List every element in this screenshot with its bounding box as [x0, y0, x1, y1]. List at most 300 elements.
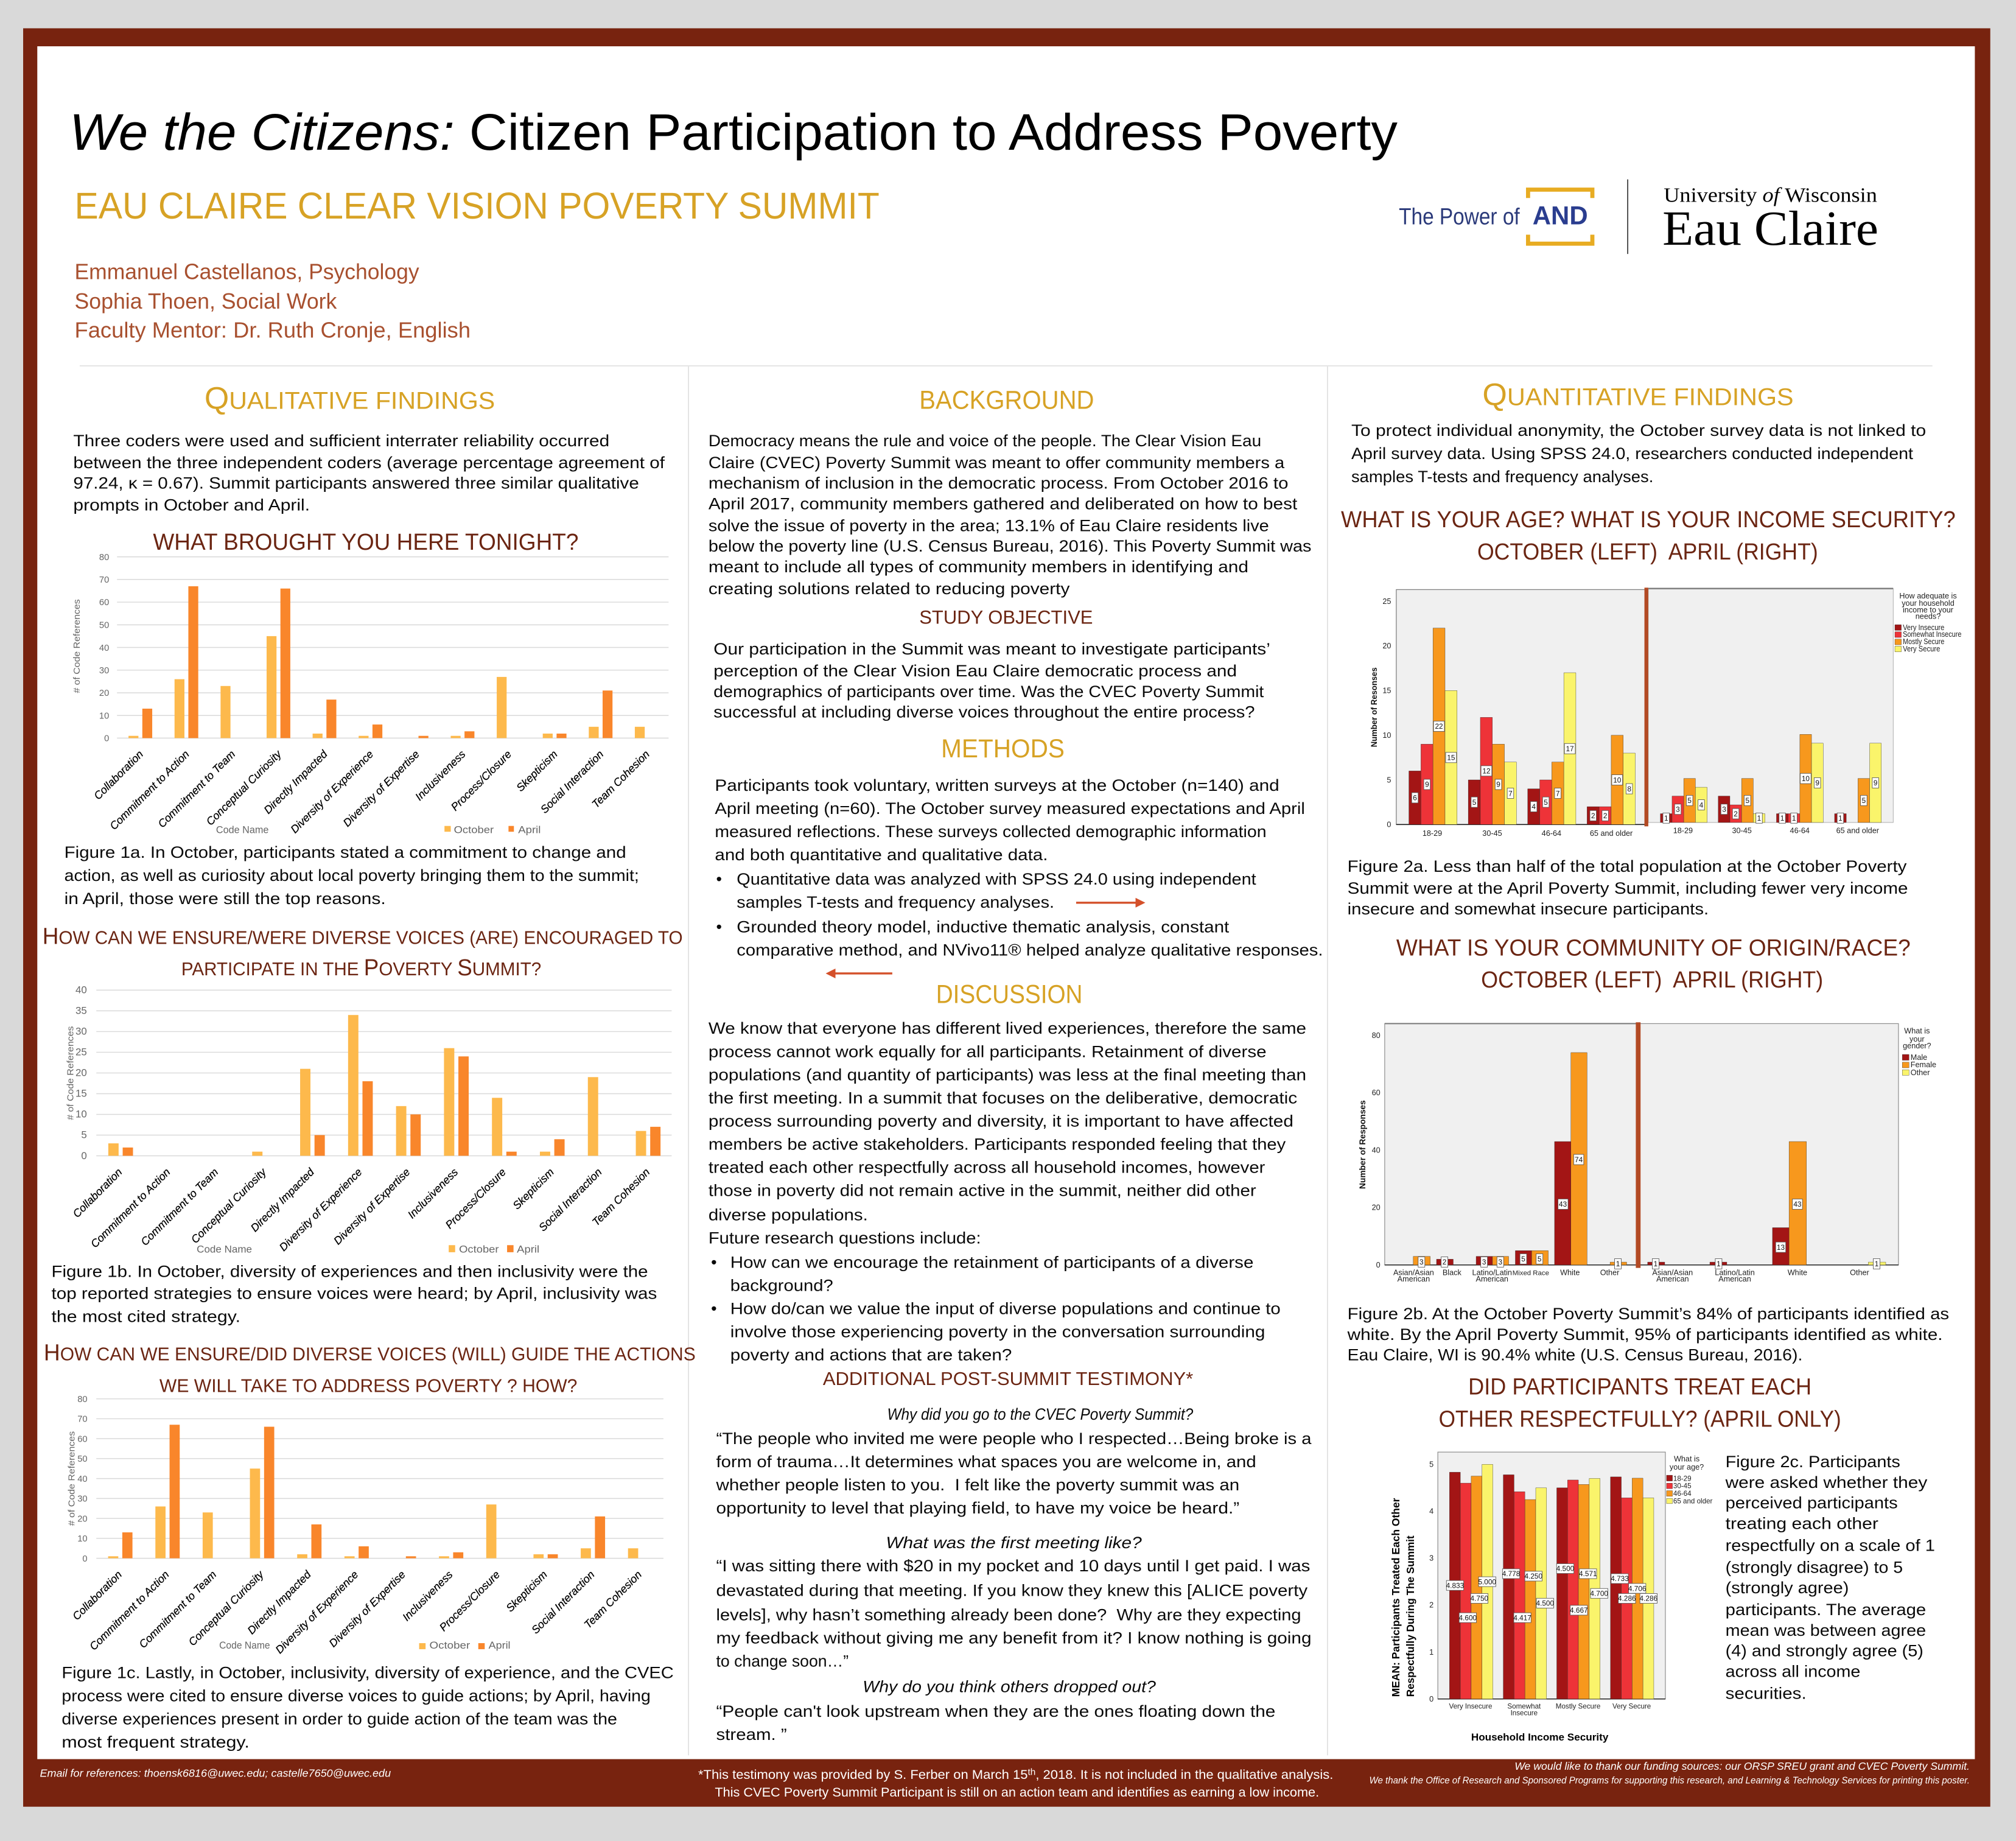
bar chart: figure 1a: Process/Closure	[449, 748, 514, 813]
bar chart: figure 1a: Social Interaction	[538, 748, 606, 816]
text block: quantitative intro	[1351, 421, 1926, 486]
text block: methods	[715, 776, 1323, 959]
value labels: 4.286	[1618, 1594, 1636, 1603]
axis labels: Very Secure	[1612, 1703, 1651, 1711]
text block: background: creating solutions related to reducing poverty	[709, 580, 1070, 598]
axis labels: Household Income Security	[1471, 1731, 1609, 1743]
caption: figure 1a: Figure 1a. In October, participants stated a commitment to change and	[65, 843, 626, 861]
text block: discussion: involve those experiencing poverty in the conversation surrounding	[730, 1323, 1265, 1341]
text block: background	[709, 432, 1311, 598]
value labels: 43	[1793, 1200, 1802, 1208]
caption: figure 2a: Figure 2a. Less than half of the total population at the October Poverty	[1348, 857, 1907, 875]
header block	[69, 103, 1398, 342]
april value labels: 3	[1722, 805, 1726, 813]
value labels: 4.571	[1579, 1569, 1597, 1578]
axis labels: 30-45	[1732, 827, 1752, 835]
heading: additional post-summit testimony: ADDITIONAL POST-SUMMIT TESTIMONY*	[823, 1369, 1193, 1389]
axis labels: Number of Responses	[1357, 1100, 1367, 1189]
legend: gender: gender?	[1903, 1042, 1931, 1050]
text block: background: Democracy means the rule and voice of the people. The Clear Vision Eau	[709, 432, 1261, 450]
october value labels	[1412, 721, 1633, 821]
text block: testimony: opportunity to level that playing field, to have my voice be heard.”	[716, 1499, 1239, 1517]
logo: The Power of AND, University of Wisconsin Eau Claire: Eau Claire	[1662, 202, 1878, 256]
legend: household income: Somewhat Insecure	[1903, 630, 1961, 639]
legend: gender: Other	[1911, 1068, 1930, 1077]
axis labels: 80	[1372, 1031, 1381, 1040]
text block: discussion: the first meeting. In a summit that focuses on the deliberative, democratic	[709, 1089, 1297, 1107]
subtitle: EAU CLAIRE CLEAR VISION POVERTY SUMMIT	[75, 185, 880, 226]
caption: figure 2b: white. By the April Poverty Summit, 95% of participants identified as white.	[1347, 1325, 1943, 1344]
text block: background: solve the issue of poverty in the area; 13.1% of Eau Claire residents live	[709, 516, 1269, 535]
bar chart: figure 1c: Collaboration	[70, 1568, 124, 1622]
bar chart: figure 1b: 40	[75, 984, 87, 996]
value labels: 4.417	[1513, 1613, 1531, 1622]
footer: acknowledgements: We thank the Office of Research and Sponsored Programs for supporting this research, and Learning & Technology Services for printing this poster.	[1370, 1776, 1970, 1786]
april value labels: 1	[1792, 814, 1796, 822]
bar chart: figure 1b: 30	[75, 1026, 87, 1037]
october value labels: 15	[1447, 754, 1455, 762]
footer: testimony note: th	[1027, 1768, 1035, 1778]
october value labels: 2	[1591, 812, 1595, 820]
bar chart: figure 1b: 15	[75, 1088, 87, 1099]
text block: testimony: whether people listen to you. I felt like the poverty summit was an	[715, 1476, 1239, 1494]
value labels: 4.600	[1459, 1613, 1477, 1622]
value labels: 5.000	[1478, 1577, 1496, 1586]
heading: background: BACKGROUND	[919, 386, 1094, 415]
value labels: 4.750	[1471, 1594, 1489, 1603]
text block: discussion: background?	[730, 1277, 833, 1295]
bar chart: figure 1c: 10	[77, 1534, 88, 1544]
arrow: to quantitative findings	[1076, 900, 1143, 906]
caption: figure 1a: in April, those were still the top reasons.	[65, 889, 386, 908]
text block: testimony: “I was sitting there with $20 in my pocket and 10 days until I get paid. I was	[716, 1557, 1310, 1575]
axis labels: Somewhat	[1507, 1703, 1541, 1711]
bar chart: figure 1a: Diversity of Expertise	[341, 748, 422, 829]
value labels: 74	[1575, 1155, 1583, 1164]
heading: age and income security: OCTOBER (LEFT) APRIL (RIGHT)	[1477, 539, 1818, 565]
caption: figure 1b: the most cited strategy.	[51, 1307, 240, 1325]
bar chart: figure 1c: October	[429, 1639, 471, 1651]
bar chart: figure 1a: 80	[99, 553, 109, 563]
caption: figure 2c: (strongly agree)	[1726, 1579, 1849, 1597]
axis labels	[1357, 1031, 1869, 1283]
axis labels: 18-29	[1423, 829, 1442, 838]
legend: age: 65 and older	[1673, 1498, 1713, 1506]
text block: discussion: •	[711, 1254, 717, 1272]
legend: household income: Very Secure	[1903, 645, 1940, 653]
caption: figure 1c: Figure 1c. Lastly, in October, inclusivity, diversity of experience, and the CVEC	[61, 1663, 674, 1681]
october value labels: 9	[1496, 780, 1500, 789]
heading: methods: METHODS	[941, 734, 1065, 763]
bar chart: figure 1a: Directly Impacted	[262, 748, 330, 816]
bar chart: figure 1b: 5	[81, 1129, 87, 1141]
caption: figure 1b	[51, 1262, 657, 1325]
bar chart: figure 1b	[65, 984, 671, 1255]
bar chart: figure 1a: 60	[99, 598, 109, 608]
heading: how can we ensure diverse voices guide actions: WE WILL TAKE TO ADDRESS POVERTY ? HOW?	[159, 1375, 577, 1396]
bar chart: figure 1c: 40	[77, 1475, 88, 1484]
axis labels: 25	[1382, 597, 1391, 606]
bar chart: figure 1c: Team Cohesion	[582, 1568, 644, 1631]
bar chart: figure 2a	[1369, 587, 1961, 838]
text block: testimony: my feedback without giving me any benefit from it? I know nothing is going	[716, 1629, 1311, 1647]
logo: The Power of AND, University of Wisconsin Eau Claire: The Power of	[1399, 205, 1520, 230]
text block: methods: •	[716, 917, 722, 936]
bar chart: figure 1a: 10	[99, 712, 109, 721]
legend: gender: your	[1909, 1035, 1925, 1043]
axis labels: 5	[1387, 776, 1391, 784]
text block: methods: Quantitative data was analyzed with SPSS 24.0 using independent	[737, 870, 1256, 888]
text block: testimony: “The people who invited me were people who I respected…Being broke is a	[716, 1429, 1312, 1448]
footer: testimony note: *This testimony was provided by S. Ferber on March 15	[698, 1768, 1015, 1782]
heading: community of origin and race: WHAT IS YOUR COMMUNITY OF ORIGIN/RACE?	[1396, 935, 1911, 961]
mean bars	[1449, 1464, 1654, 1699]
bar chart: figure 1a: Inclusiveness	[413, 748, 468, 803]
april value labels: 9	[1874, 779, 1878, 787]
heading: community of origin and race: OCTOBER (LEFT) APRIL (RIGHT)	[1481, 967, 1823, 993]
text block: methods: samples T-tests and frequency analyses.	[737, 893, 1054, 911]
caption: figure 1c: process were cited to ensure diverse voices to guide actions; by April, having	[61, 1686, 651, 1705]
april value labels: 10	[1802, 774, 1810, 783]
october value labels: 17	[1566, 745, 1574, 753]
footer	[40, 1760, 1970, 1800]
bar chart: figure 1a: 0	[104, 734, 109, 744]
axis labels: White	[1788, 1269, 1807, 1277]
value labels: 1	[1717, 1260, 1721, 1268]
bar chart: figure 1a: April	[518, 824, 541, 836]
text block: background: meant to include all types of community members in identifying and	[709, 558, 1248, 576]
axis labels: Asian/Asian	[1393, 1269, 1434, 1277]
text block: methods: Grounded theory model, inductive thematic analysis, constant	[737, 917, 1230, 936]
caption: figure 2c: securities.	[1726, 1684, 1807, 1702]
bar chart: figure 1a: October	[454, 824, 494, 836]
text block: discussion: treated each other respectfully across all household incomes, however	[709, 1158, 1265, 1176]
bar chart: figure 1b: Code Name	[197, 1243, 252, 1255]
axis labels: Latino/Latin	[1715, 1269, 1755, 1277]
bar chart: figure 1b: October	[459, 1243, 499, 1255]
bar chart: figure 1c: Process/Closure	[437, 1568, 502, 1633]
bar chart: figure 1b: April	[517, 1243, 539, 1255]
april value labels: 4	[1699, 801, 1704, 809]
october value labels: 5	[1472, 798, 1477, 807]
axis labels	[1369, 597, 1879, 838]
legend: age: 30-45	[1673, 1482, 1692, 1490]
bar chart: figure 1c: 70	[77, 1415, 88, 1425]
bar chart: figure 1b: Skepticism	[510, 1166, 556, 1212]
bar chart: figure 1a: Code Name	[216, 824, 268, 836]
caption: figure 2a: Summit were at the April Poverty Summit, including fewer very income	[1348, 879, 1908, 897]
text block: discussion: process cannot work equally for all participants. Retainment of diverse	[709, 1042, 1267, 1061]
caption: figure 2b: Eau Claire, WI is 90.4% white (U.S. Census Bureau, 2016).	[1348, 1346, 1802, 1364]
bar chart: figure 1c: Commitment to Team	[136, 1568, 219, 1650]
value labels: 3	[1498, 1258, 1502, 1266]
caption: figure 2c: were asked whether they	[1725, 1473, 1928, 1492]
axis labels: Number of Resonses	[1369, 667, 1379, 747]
heading: age and income security	[1341, 507, 1956, 565]
text block: testimony: Why did you go to the CVEC Poverty Summit?	[887, 1405, 1193, 1423]
bar chart: figure 1a: Conceptual Curiosity	[204, 748, 284, 828]
caption: figure 2a	[1348, 857, 1908, 918]
bar chart: figure 1b: 35	[75, 1005, 87, 1017]
bar chart: figure 1c: Directly Impacted	[245, 1568, 313, 1636]
legend: gender: Female	[1911, 1061, 1936, 1069]
footer: testimony note: This CVEC Poverty Summit Participant is still on an action team and identifies as earning a low income.	[715, 1786, 1319, 1800]
bar chart: figure 1c: Commitment to Action	[87, 1568, 172, 1653]
value labels: 5	[1538, 1255, 1542, 1263]
value labels: 4.286	[1640, 1594, 1658, 1603]
axis labels: American	[1476, 1275, 1508, 1283]
bar chart: figure 1c: Code Name	[219, 1639, 270, 1651]
caption: figure 2a: insecure and somewhat insecure participants.	[1348, 900, 1709, 918]
axis labels: Insecure	[1511, 1709, 1538, 1717]
value labels: 4.500	[1556, 1565, 1575, 1573]
divider between october and april	[1645, 587, 1648, 826]
april bars	[1661, 734, 1881, 822]
axis labels: 0	[1376, 1261, 1381, 1269]
text block: quantitative intro: To protect individual anonymity, the October survey data is not linked to	[1351, 421, 1926, 440]
heading: how can we ensure diverse voices encouraged	[43, 924, 683, 981]
caption: figure 2c: (strongly disagree) to 5	[1726, 1558, 1903, 1576]
text block: study objective: perception of the Clear Vision Eau Claire democratic process and	[713, 662, 1237, 680]
heading: what brought you here: WHAT BROUGHT YOU HERE TONIGHT?	[153, 530, 579, 555]
axis labels: 2	[1429, 1601, 1433, 1610]
value labels: 4.706	[1628, 1584, 1647, 1593]
text block: discussion: poverty and actions that are taken?	[730, 1346, 1012, 1364]
text block: testimony	[715, 1405, 1312, 1744]
text block: discussion: We know that everyone has different lived experiences, therefore the same	[709, 1019, 1306, 1037]
authors: Faculty Mentor: Dr. Ruth Cronje, English	[75, 318, 471, 342]
text block: discussion: members be active stakeholders. Participants responded feeling that they	[709, 1135, 1286, 1153]
caption: figure 1c: diverse experiences present in order to guide action of the team was the	[61, 1710, 617, 1728]
axis labels: Mostly Secure	[1556, 1703, 1600, 1711]
october value labels: 8	[1627, 785, 1631, 793]
bar chart: figure 1a: # of Code References	[72, 599, 82, 693]
footer: acknowledgements: We would like to thank our funding sources: our ORSP SREU grant and CVEC Poverty Summit.	[1514, 1760, 1970, 1772]
panel: qualitative findings	[43, 381, 696, 1752]
text block: study objective: successful at including diverse voices throughout the entire process?	[713, 703, 1255, 721]
october value labels: 12	[1482, 767, 1491, 776]
axis labels: 0	[1429, 1695, 1433, 1703]
caption: figure 2c: Figure 2c. Participants	[1726, 1453, 1900, 1471]
october value labels: 7	[1508, 789, 1513, 798]
axis labels: Latino/Latin	[1472, 1269, 1512, 1277]
axis labels: Mixed Race	[1513, 1270, 1549, 1277]
text block: discussion: Future research questions include:	[709, 1229, 981, 1247]
bar chart: figure 1b: Conceptual Curiosity	[189, 1165, 269, 1246]
bar chart: figure 1a: Diversity of Experience	[288, 748, 376, 835]
heading: did participants treat each other respectfully	[1439, 1375, 1841, 1432]
bar chart: figure 1b: 20	[75, 1067, 87, 1079]
october value labels: 2	[1603, 812, 1607, 820]
text block: background: below the poverty line (U.S. Census Bureau, 2016). This Poverty Summit was	[709, 537, 1311, 555]
text block: testimony: levels], why hasn’t something already been done? Why are they expecting	[716, 1605, 1301, 1624]
bar chart: figure 1a: Skepticism	[514, 748, 560, 794]
april value labels: 1	[1757, 814, 1761, 822]
text block: study objective: Our participation in the Summit was meant to investigate participants’	[713, 640, 1270, 658]
text block: quantitative intro: April survey data. Using SPSS 24.0, researchers conducted independent	[1351, 444, 1914, 463]
october bars	[1409, 628, 1636, 824]
bar chart: figure 1c: Diversity of Experience	[273, 1568, 360, 1656]
axis labels: 4	[1429, 1507, 1433, 1516]
axis labels: Other	[1600, 1269, 1619, 1277]
axis labels: 1	[1429, 1648, 1433, 1657]
april value labels: 5	[1862, 796, 1866, 805]
value labels: 43	[1559, 1200, 1567, 1208]
april value labels: 1	[1664, 814, 1668, 822]
value labels: 4.667	[1570, 1606, 1588, 1615]
caption: figure 1c: most frequent strategy.	[61, 1733, 250, 1752]
text block: background: Claire (CVEC) Poverty Summit was meant to offer community members a	[709, 454, 1285, 472]
legend: household income: Mostly Secure	[1903, 637, 1944, 646]
heading: did participants treat each other respectfully: OTHER RESPECTFULLY? (APRIL ONLY)	[1439, 1407, 1841, 1432]
panel: middle column	[709, 386, 1323, 1744]
logo: The Power of AND, University of Wisconsin Eau Claire: University of Wisconsin	[1664, 184, 1877, 207]
heading: age and income security: WHAT IS YOUR AGE? WHAT IS YOUR INCOME SECURITY?	[1341, 507, 1956, 533]
bar chart: figure 1a: 30	[99, 666, 109, 676]
caption: figure 2c: mean was between agree	[1726, 1621, 1926, 1639]
bar chart: figure 1a: 20	[99, 689, 109, 698]
october value labels: 10	[1613, 776, 1622, 784]
bar chart: figure 1c: 30	[77, 1495, 88, 1504]
april value labels: 1	[1780, 814, 1784, 822]
axis labels: Respectfully During The Summit	[1404, 1535, 1416, 1697]
bar chart: figure 1c: Skepticism	[503, 1568, 550, 1615]
caption: figure 2b	[1347, 1305, 1949, 1364]
axis labels: 40	[1372, 1146, 1381, 1154]
text block: methods: April meeting (n=60). The October survey measured expectations and April	[715, 799, 1305, 818]
axis labels: 46-64	[1790, 827, 1810, 835]
caption: figure 1c	[61, 1663, 674, 1752]
heading: discussion: DISCUSSION	[936, 980, 1083, 1009]
bar chart: figure 1c: Inclusiveness	[400, 1568, 455, 1623]
value labels: 1	[1875, 1260, 1878, 1268]
bar chart: figure 2b	[1357, 1022, 1936, 1283]
axis labels: 3	[1429, 1554, 1433, 1563]
axis labels: 5	[1429, 1461, 1433, 1469]
text block: testimony: What was the first meeting like?	[886, 1534, 1142, 1552]
april value labels: 2	[1734, 810, 1738, 818]
value labels: 4.778	[1502, 1569, 1521, 1578]
axis labels: 60	[1372, 1089, 1381, 1097]
footer: acknowledgements	[1370, 1760, 1970, 1786]
october value labels: 6	[1413, 794, 1417, 802]
april value labels: 1	[1838, 814, 1843, 822]
bar chart: figure 1b: Commitment to Team	[138, 1166, 220, 1248]
caption: figure 1a	[65, 843, 639, 908]
axis labels: 0	[1387, 821, 1391, 829]
axis labels: 46-64	[1542, 829, 1561, 838]
bar chart: figure 1c: Social Interaction	[529, 1568, 597, 1636]
bar chart: figure 1b: Social Interaction	[536, 1166, 604, 1233]
legend: household income: income to your	[1903, 606, 1953, 614]
text block: testimony: stream. ”	[716, 1725, 787, 1744]
legend: age: 46-64	[1673, 1490, 1692, 1498]
value labels: 13	[1777, 1243, 1785, 1252]
text block: qualitative intro: Three coders were used and sufficient interrater reliability occurred	[73, 432, 609, 450]
text block: testimony: devastated during that meeting. If you know they knew this [ALICE poverty	[716, 1581, 1308, 1599]
text block: discussion: process surrounding poverty and diversity, it is important to have affected	[709, 1112, 1293, 1130]
text block: testimony: to change soon…”	[716, 1652, 849, 1670]
bar chart: figure 1b: Commitment to Action	[88, 1166, 173, 1250]
text block: discussion	[709, 1019, 1306, 1364]
bar chart: figure 1b: 25	[75, 1047, 87, 1058]
heading: how can we ensure diverse voices encouraged: HOW CAN WE ENSURE/WERE DIVERSE VOICES (ARE) ENCOURAGED TO	[43, 924, 683, 949]
text block: qualitative intro: between the three independent coders (average percentage agreement of	[73, 454, 665, 472]
axis labels: 20	[1372, 1204, 1381, 1212]
heading: did participants treat each other respectfully: DID PARTICIPANTS TREAT EACH	[1468, 1375, 1811, 1400]
footer: testimony note: , 2018. It is not included in the qualitative analysis.	[1035, 1768, 1333, 1782]
caption: figure 2c: (4) and strongly agree (5)	[1726, 1642, 1923, 1660]
bar chart: figure 1b: 0	[81, 1150, 87, 1162]
text block: discussion: diverse populations.	[709, 1206, 868, 1224]
text block: discussion: •	[711, 1300, 717, 1318]
october value labels: 7	[1556, 789, 1559, 798]
text block: discussion: populations (and quantity of participants) was less at the final meeting than	[709, 1065, 1306, 1084]
april value labels: 9	[1815, 779, 1819, 787]
bar chart: figure 1b: Directly Impacted	[248, 1165, 317, 1234]
text block: methods: Participants took voluntary, written surveys at the October (n=140) and	[715, 776, 1279, 794]
bar chart: figure 1c	[67, 1395, 663, 1656]
value labels: 3	[1419, 1258, 1424, 1266]
heading: how can we ensure diverse voices guide actions	[44, 1341, 696, 1396]
text block: methods: comparative method, and NVivo11® helped analyze qualitative responses.	[737, 941, 1323, 959]
axis labels: White	[1560, 1269, 1580, 1277]
heading: quantitative findings: QUANTITATIVE FINDINGS	[1482, 377, 1794, 412]
april value labels: 5	[1687, 796, 1692, 805]
bar chart: figure 2c	[1390, 1452, 1713, 1743]
caption: figure 2c: participants. The average	[1726, 1601, 1926, 1619]
legend: gender: Male	[1911, 1053, 1927, 1062]
value labels: 5	[1521, 1255, 1525, 1263]
bar chart: figure 1a: Team Cohesion	[589, 748, 652, 810]
logo: The Power of AND, University of Wisconsin Eau Claire: AND	[1533, 202, 1588, 230]
value labels: 4.733	[1611, 1574, 1629, 1583]
bar chart: figure 1c: 0	[82, 1554, 88, 1564]
bar chart: figure 1b: Diversity of Expertise	[331, 1166, 412, 1247]
text block: quantitative intro: samples T-tests and frequency analyses.	[1351, 468, 1653, 486]
logo: The Power of AND, University of Wisconsin Eau Claire	[1399, 180, 1878, 256]
axis labels: 20	[1382, 642, 1391, 650]
text block: methods: •	[716, 870, 722, 888]
legend: household income: needs?	[1916, 612, 1941, 621]
text block: discussion: How can we encourage the retainment of participants of a diverse	[730, 1254, 1253, 1272]
axis labels: Asian/Asian	[1652, 1269, 1693, 1277]
bar chart: figure 1a	[72, 553, 668, 836]
caption: figure 1a: action, as well as curiosity about local poverty bringing them to the summit;	[65, 866, 639, 885]
panel: quantitative findings	[1341, 377, 1961, 1743]
caption: figure 2c: perceived participants	[1726, 1494, 1898, 1512]
text block: study objective	[713, 640, 1270, 721]
axis labels: 30-45	[1482, 829, 1502, 838]
value labels: 1	[1654, 1260, 1657, 1268]
bar chart: figure 1b: Inclusiveness	[405, 1166, 460, 1221]
bar chart: figure 1b: Diversity of Experience	[277, 1166, 365, 1254]
legend: household income: your household	[1902, 599, 1955, 608]
value labels: 4.250	[1524, 1572, 1542, 1580]
text block: discussion: those in poverty did not remain active in the summit, neither did other	[709, 1181, 1256, 1199]
heading: study objective: STUDY OBJECTIVE	[919, 606, 1093, 628]
text block: qualitative intro	[73, 432, 665, 514]
caption: figure 1b: top reported strategies to ensure voices were heard; by April, inclusivity was	[51, 1284, 657, 1302]
text block: background: April 2017, community members gathered and deliberated on how to best	[709, 494, 1298, 513]
bar chart: figure 1a: 50	[99, 621, 109, 631]
text block: background: mechanism of inclusion in the democratic process. From October 2016 to	[709, 474, 1288, 493]
legend: age: your age?	[1670, 1463, 1704, 1471]
bar chart: figure 1a: Commitment to Action	[107, 748, 192, 832]
legend: household income	[1895, 592, 1961, 653]
caption: figure 2b: Figure 2b. At the October Poverty Summit’s 84% of participants identified as	[1348, 1305, 1949, 1323]
arrow: to qualitative findings	[828, 970, 892, 977]
